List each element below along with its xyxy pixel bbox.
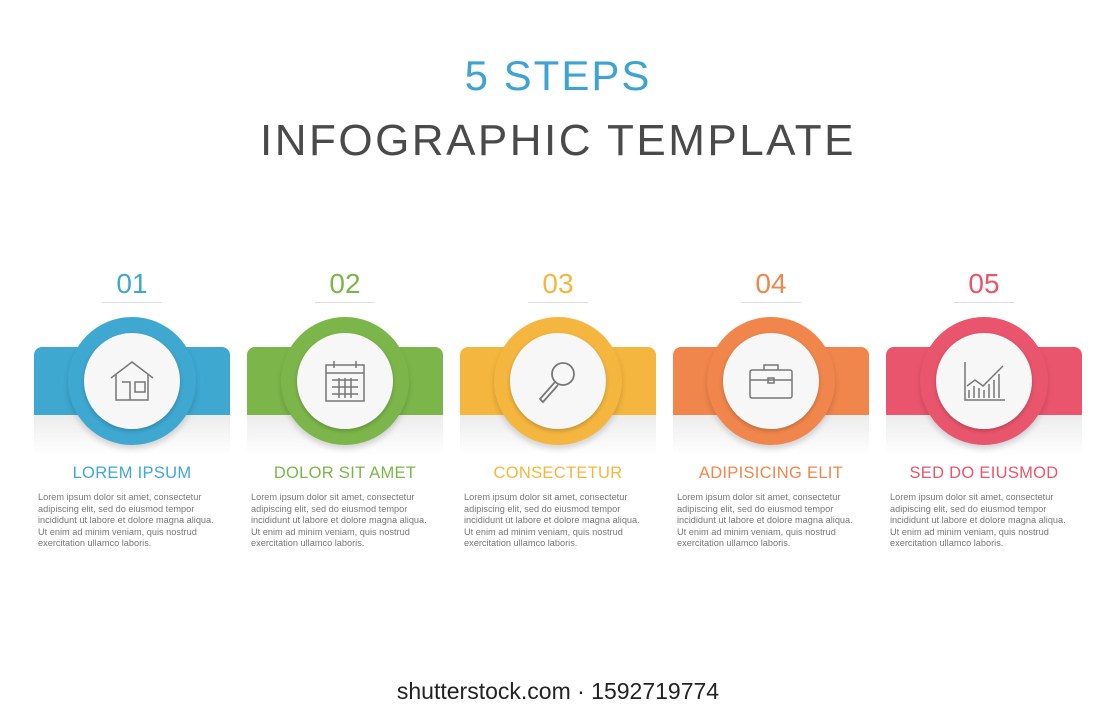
step 5: exercitation ullamco laboris. — [890, 538, 1003, 548]
step 3 — [460, 268, 656, 548]
step 5: adipiscing elit, sed do eiusmod tempor — [890, 504, 1046, 514]
step 1 — [34, 268, 230, 548]
step 2: 02 — [329, 268, 361, 299]
icon: chart — [964, 362, 1005, 401]
step 3: 03 — [542, 268, 574, 299]
step 1: Lorem ipsum dolor sit amet, consectetur — [38, 492, 201, 502]
step 2: DOLOR SIT AMET — [274, 464, 416, 482]
step 2: incididunt ut labore et dolore magna aliqua. — [251, 515, 427, 525]
step 1: LOREM IPSUM — [73, 464, 191, 482]
step 4: ADIPISICING ELIT — [699, 464, 843, 482]
step 4: Ut enim ad minim veniam, quis nostrud — [677, 526, 836, 536]
step 1: adipiscing elit, sed do eiusmod tempor — [38, 504, 194, 514]
step 4: adipiscing elit, sed do eiusmod tempor — [677, 504, 833, 514]
step 5: incididunt ut labore et dolore magna aliqua. — [890, 515, 1066, 525]
step 5: Lorem ipsum dolor sit amet, consectetur — [890, 492, 1053, 502]
step 1: incididunt ut labore et dolore magna aliqua. — [38, 515, 214, 525]
step 4: incididunt ut labore et dolore magna aliqua. — [677, 515, 853, 525]
step 5 — [886, 268, 1082, 548]
step 2: adipiscing elit, sed do eiusmod tempor — [251, 504, 407, 514]
step 3: CONSECTETUR — [494, 464, 622, 482]
step 2 — [247, 268, 443, 548]
step 4: 04 — [755, 268, 787, 299]
step 1: exercitation ullamco laboris. — [38, 538, 151, 548]
step 2: Lorem ipsum dolor sit amet, consectetur — [251, 492, 414, 502]
step 3: adipiscing elit, sed do eiusmod tempor — [464, 504, 620, 514]
step 3: exercitation ullamco laboris. — [464, 538, 577, 548]
step 5: Ut enim ad minim veniam, quis nostrud — [890, 526, 1049, 536]
step 3: Ut enim ad minim veniam, quis nostrud — [464, 526, 623, 536]
step 1: 01 — [116, 268, 148, 299]
step 2: exercitation ullamco laboris. — [251, 538, 364, 548]
step 2: Ut enim ad minim veniam, quis nostrud — [251, 526, 410, 536]
step 1: Ut enim ad minim veniam, quis nostrud — [38, 526, 197, 536]
step 3: incididunt ut labore et dolore magna aliqua. — [464, 515, 640, 525]
step 3: Lorem ipsum dolor sit amet, consectetur — [464, 492, 627, 502]
subtitle: INFOGRAPHIC TEMPLATE — [260, 116, 856, 165]
step 5: SED DO EIUSMOD — [909, 464, 1059, 482]
icon: briefcase — [749, 364, 793, 399]
step 4 — [673, 268, 869, 548]
icon: house — [110, 361, 154, 401]
footer watermark: shutterstock.com · 1592719774 — [397, 678, 719, 704]
step 4: Lorem ipsum dolor sit amet, consectetur — [677, 492, 840, 502]
icon: calendar — [325, 361, 365, 402]
step 5: 05 — [968, 268, 1000, 299]
step 4: exercitation ullamco laboris. — [677, 538, 790, 548]
icon: magnifier — [538, 362, 575, 404]
title: 5 STEPS — [465, 52, 651, 99]
